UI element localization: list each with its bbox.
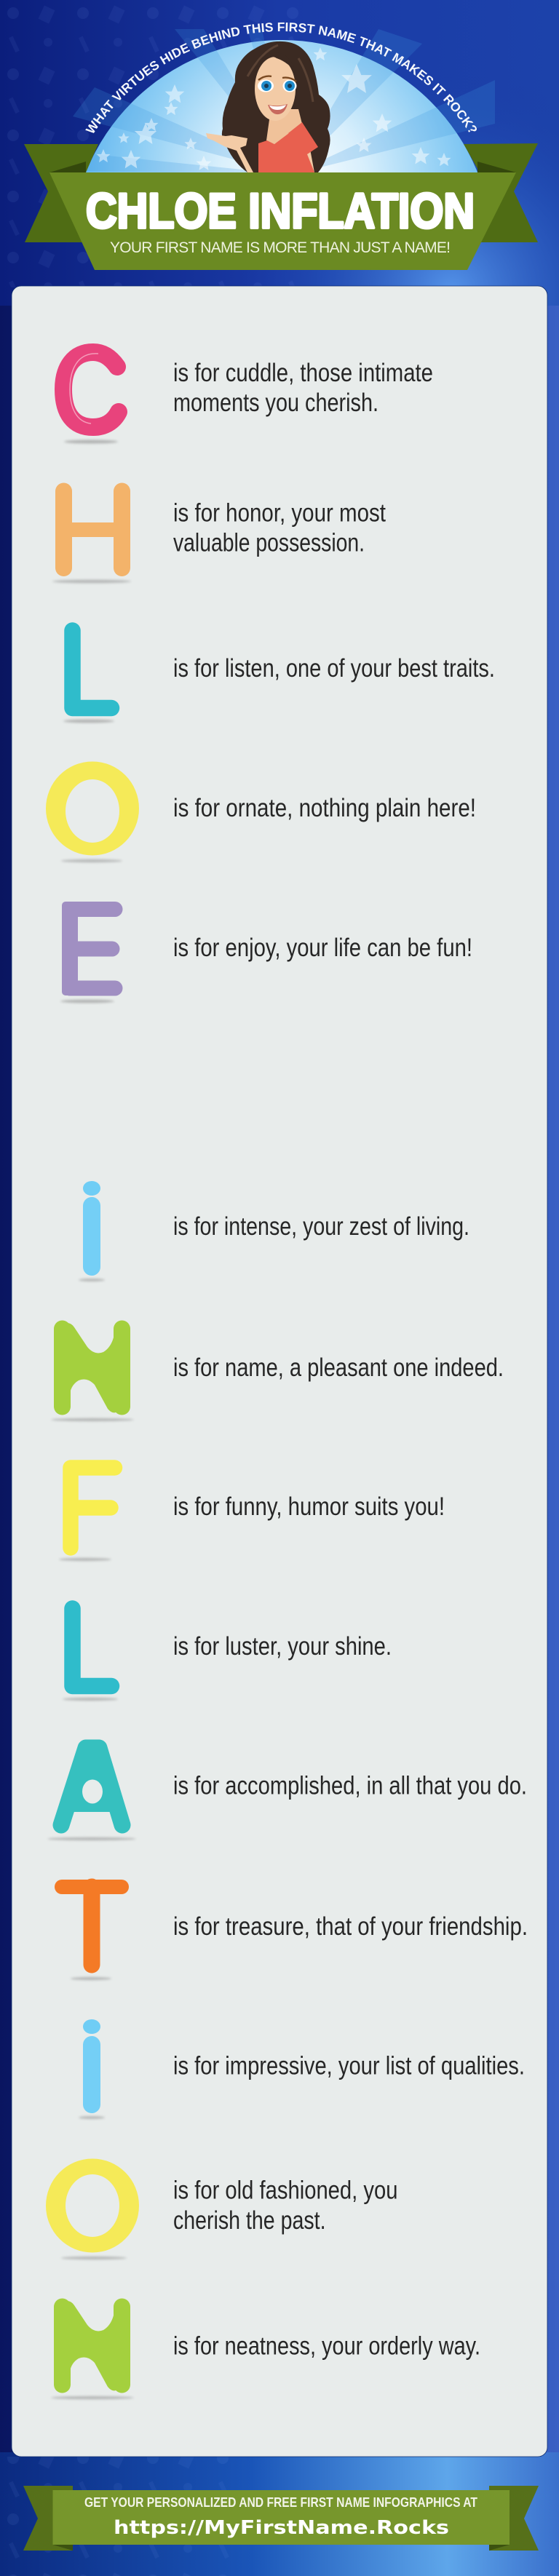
neck [266, 109, 302, 145]
footer line: GET YOUR PERSONALIZED AND FREE FIRST NAME INFOGRAPHICS AT [84, 2495, 477, 2510]
text: H: valuable possession. [173, 528, 365, 557]
text: I: is for intense, your zest of living. [173, 1212, 469, 1241]
letter O (second) [46, 2158, 139, 2259]
letter N (second) [51, 2301, 134, 2399]
text: L second: is for luster, your shine. [173, 1632, 392, 1661]
ribbon main [49, 172, 516, 270]
subtitle: YOUR FIRST NAME IS MORE THAN JUST A NAME! [110, 239, 451, 256]
text: O second: cherish the past. [173, 2206, 326, 2235]
letter L [63, 630, 114, 723]
text: N second: is for neatness, your orderly way. [173, 2331, 480, 2361]
character illustration [206, 41, 330, 172]
letter H [52, 491, 131, 583]
text: C: is for cuddle, those intimate [173, 359, 433, 387]
letter N [51, 1323, 134, 1421]
text: L: is for listen, one of your best traits. [173, 654, 495, 683]
curved tagline: WHAT VIRTUES HIDE BEHIND THIS FIRST NAME THAT MAKES IT ROCK? [85, 22, 477, 133]
footer ribbon [23, 2486, 539, 2551]
text: O second [173, 2176, 397, 2235]
ribbon tails [24, 144, 98, 242]
arms [206, 133, 253, 172]
letter T [62, 1887, 122, 1980]
shirt [258, 122, 318, 172]
title: CHLOE INFLATION [86, 183, 475, 239]
text: O second: is for old fashioned, you [173, 2176, 397, 2205]
text: F: is for funny, humor suits you! [173, 1492, 445, 1521]
letter O [46, 761, 139, 862]
letter L (second) [63, 1608, 118, 1701]
text: C: moments you cherish. [173, 389, 378, 417]
header arch with burst and stars [73, 29, 495, 172]
eyebrows [258, 76, 296, 82]
letter C [63, 352, 119, 444]
mouth [268, 104, 288, 114]
text: H [173, 499, 386, 557]
hair [222, 41, 330, 172]
letter I (second) [79, 2019, 105, 2119]
letter I [79, 1181, 105, 1281]
eyes [258, 80, 274, 92]
text: E: is for enjoy, your life can be fun! [173, 934, 472, 962]
title ribbon [24, 143, 538, 270]
text: O: is for ornate, nothing plain here! [173, 794, 476, 822]
text: H: is for honor, your most [173, 499, 386, 527]
letter E [60, 902, 115, 1003]
letter A [47, 1748, 136, 1840]
text: C [173, 359, 433, 417]
footer url: https://MyFirstName.Rocks [114, 2517, 449, 2539]
letter F [59, 1468, 115, 1561]
face [255, 57, 296, 121]
